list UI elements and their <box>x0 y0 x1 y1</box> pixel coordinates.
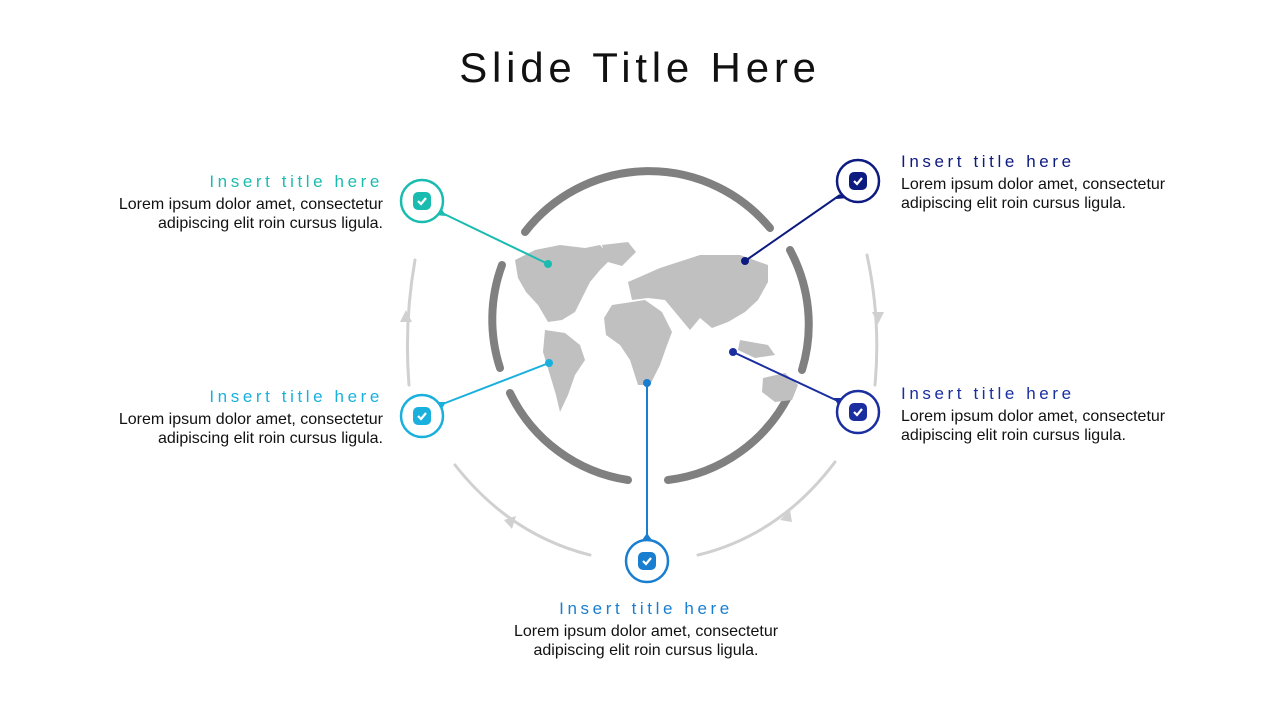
icon: check dark blue <box>834 391 879 433</box>
icon: check teal <box>401 180 446 222</box>
text: bottom: adipiscing elit roin cursus ligula. <box>534 642 758 659</box>
text: bottom right: adipiscing elit roin cursus ligula. <box>901 427 1126 444</box>
text: top right: Insert title here <box>901 152 1075 171</box>
text: top right: Lorem ipsum dolor amet, consectetur <box>901 176 1165 193</box>
gray ring <box>492 171 809 480</box>
text: bottom right: Insert title here <box>901 384 1075 403</box>
text: bottom: Lorem ipsum dolor amet, consectetur <box>514 623 778 640</box>
text: middle left <box>119 387 383 447</box>
text: top left: Insert title here <box>209 172 383 191</box>
icon: check blue <box>626 533 668 582</box>
text: top left <box>119 172 383 232</box>
text: bottom right <box>901 384 1165 444</box>
text: middle left: Lorem ipsum dolor amet, consectetur <box>119 411 383 428</box>
arrowheads <box>400 310 884 529</box>
title: Slide Title Here <box>459 44 821 91</box>
connector lines <box>440 195 840 541</box>
text: middle left: Insert title here <box>209 387 383 406</box>
outer light arcs <box>407 255 877 555</box>
text: bottom: Insert title here <box>559 599 733 618</box>
text: top left: Lorem ipsum dolor amet, consectetur <box>119 196 383 213</box>
world map <box>515 242 798 412</box>
icon: check navy <box>836 160 879 202</box>
text: bottom <box>514 599 778 659</box>
text: middle left: adipiscing elit roin cursus ligula. <box>158 430 383 447</box>
text: bottom right: Lorem ipsum dolor amet, consectetur <box>901 408 1165 425</box>
icon: check light blue <box>401 395 446 437</box>
text: top left: adipiscing elit roin cursus ligula. <box>158 215 383 232</box>
map dots <box>544 260 552 268</box>
text: top right <box>901 152 1165 212</box>
text: top right: adipiscing elit roin cursus ligula. <box>901 195 1126 212</box>
